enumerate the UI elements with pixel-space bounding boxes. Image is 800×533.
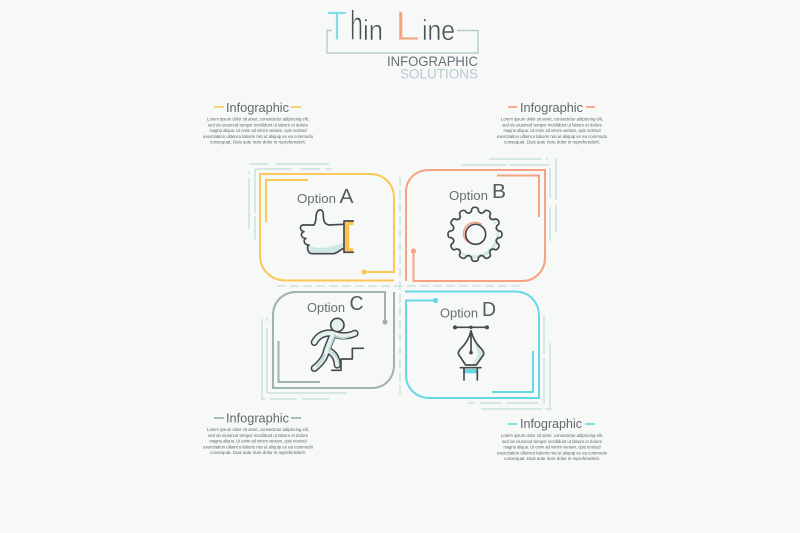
block: Infographic top right: Infographic (520, 100, 583, 115)
title: in (363, 15, 383, 47)
block: Infographic top right: consequat. Duis aute irure dolor in reprehenderit. (504, 140, 600, 145)
panel: option C: Option (307, 301, 345, 315)
block: Infographic top right: Lorem ipsum dolor sit amet, consectetur adipiscing elit, (501, 116, 603, 122)
block: Infographic bottom right: magna aliqua. Ut enim ad minim veniam, quis nostrud (504, 445, 601, 450)
panel: option A (260, 174, 394, 280)
title: T (327, 2, 347, 49)
title: INFOGRAPHIC (387, 53, 478, 69)
block: Infographic bottom left: exercitation ullamco laboris nisi ut aliquip ex ea commodo (203, 444, 314, 449)
title: h (350, 2, 363, 49)
icon: thumbs up (300, 210, 353, 254)
panel: option B (406, 170, 545, 281)
panel: option B: B (492, 181, 506, 203)
icon: pen nib (453, 325, 489, 380)
block: Infographic bottom left: sed do eiusmod tempor incididunt ut labore et dolore (208, 433, 309, 438)
panel: option C: C (350, 293, 364, 315)
block: Infographic bottom right: consequat. Duis aute irure dolor in reprehenderit. (504, 456, 600, 461)
panel: option D: D (482, 299, 496, 321)
title (327, 2, 478, 82)
panel: option A: Option (297, 192, 336, 206)
panel: option D (405, 292, 539, 398)
block: Infographic top left: consequat. Duis aute irure dolor in reprehenderit. (210, 140, 306, 145)
block: Infographic top right: sed do eiusmod tempor incididunt ut labore et dolore (502, 122, 603, 127)
block: Infographic top left (203, 100, 314, 145)
block: Infographic top left: magna aliqua. Ut enim ad minim veniam, quis nostrud (210, 128, 307, 133)
block: Infographic top left: Infographic (226, 100, 289, 115)
panel: option A: A (340, 186, 354, 208)
block: Infographic bottom right: Infographic (520, 416, 582, 431)
block: Infographic bottom right: sed do eiusmod tempor incididunt ut labore et dolore (502, 439, 603, 444)
title: ine (422, 15, 455, 47)
icon: gear (448, 207, 502, 261)
panel: option D: Option (440, 306, 478, 320)
block: Infographic top right: exercitation ullamco laboris nisi ut aliquip ex ea commodo (497, 134, 608, 139)
block: Infographic bottom right: exercitation ullamco laboris nisi ut aliquip ex ea commodo (497, 450, 608, 455)
block: Infographic top left: exercitation ullamco laboris nisi ut aliquip ex ea commodo (203, 134, 314, 139)
title: SOLUTIONS (400, 66, 478, 82)
icon: runner on stairs (314, 318, 363, 370)
block: Infographic bottom left: consequat. Duis aute irure dolor in reprehenderit. (210, 450, 306, 455)
block: Infographic bottom left: Infographic (226, 410, 289, 426)
block: Infographic bottom left: magna aliqua. Ut enim ad minim veniam, quis nostrud (210, 439, 307, 444)
block: Infographic top right: magna aliqua. Ut enim ad minim veniam, quis nostrud (504, 128, 601, 133)
block: Infographic bottom left: Lorem ipsum dolor sit amet, consectetur adipiscing elit, (207, 427, 309, 432)
block: Infographic top left: sed do eiusmod tempor incididunt ut labore et dolore (208, 122, 309, 127)
block: Infographic top right (497, 100, 608, 145)
block: Infographic bottom right (497, 416, 608, 461)
panel: option C (273, 292, 394, 388)
block: Infographic bottom right: Lorem ipsum dolor sit amet, consectetur adipiscing elit, (501, 433, 603, 438)
panel: option B: Option (449, 189, 488, 203)
block: Infographic bottom left (203, 410, 314, 455)
title: L (395, 2, 420, 49)
block: Infographic top left: Lorem ipsum dolor sit amet, consectetur adipiscing elit, (207, 116, 309, 122)
